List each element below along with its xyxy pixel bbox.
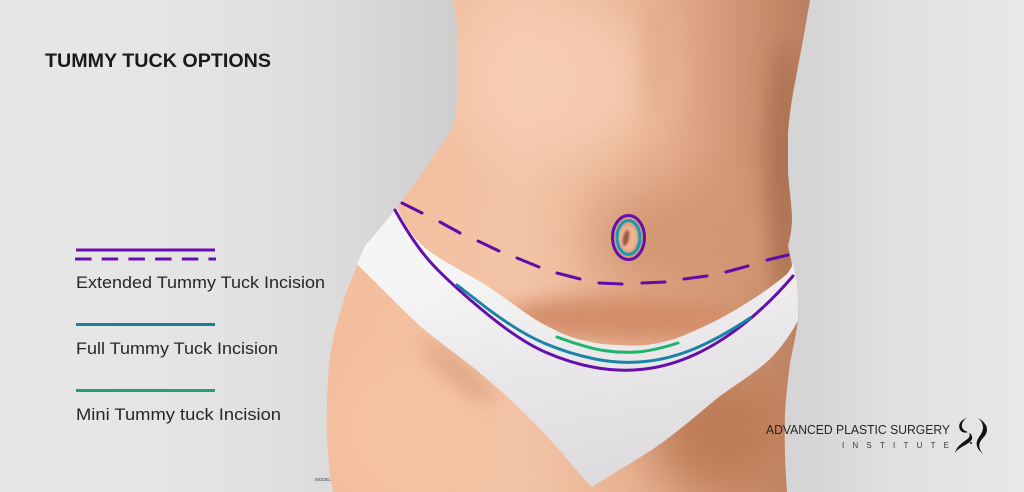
underwear xyxy=(357,208,798,487)
logo subline: INSTITUTE xyxy=(842,441,949,450)
full incision line xyxy=(457,285,750,362)
legend: full label: Full Tummy Tuck Incision xyxy=(76,340,278,358)
legend: mini swatch xyxy=(76,389,215,392)
navel xyxy=(619,225,637,251)
mini incision line xyxy=(557,337,678,352)
legend: mini label: Mini Tummy tuck Incision xyxy=(76,406,281,424)
logo swirl mark xyxy=(955,418,987,454)
logo xyxy=(766,418,987,454)
extended incision solid line xyxy=(395,210,793,370)
legend: extended label: Extended Tummy Tuck Incision xyxy=(76,274,325,292)
navel incision rings xyxy=(612,216,644,260)
model disclaimer: MODEL xyxy=(315,477,332,482)
title: TUMMY TUCK OPTIONS xyxy=(45,50,271,72)
legend: full swatch xyxy=(76,323,215,326)
logo wordmark: ADVANCED PLASTIC SURGERY xyxy=(766,422,950,437)
extended incision dashed line xyxy=(402,203,788,284)
photo: torso and underwear xyxy=(327,0,810,492)
legend xyxy=(75,248,325,424)
legend: extended swatch xyxy=(75,248,216,259)
torso skin xyxy=(327,0,810,492)
